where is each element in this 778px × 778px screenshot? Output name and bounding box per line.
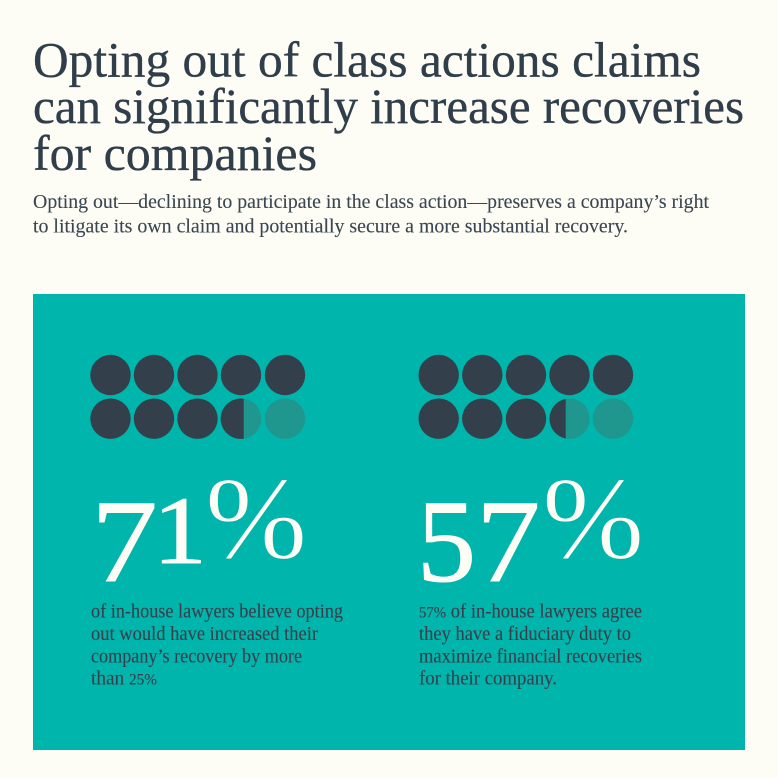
big number 71%: 1 <box>153 478 207 585</box>
panel: statistics <box>33 294 745 750</box>
intro text <box>33 191 709 238</box>
title: can significantly increase recoveries <box>33 78 744 134</box>
statistic: 71% <box>90 355 343 690</box>
intro text: to litigate its own claim and potentially secure a more substantial recovery. <box>33 216 628 238</box>
big number 57%: 7 <box>476 476 540 607</box>
title: Opting out of class actions claims <box>33 32 701 88</box>
icon: ten-dot gauge 57% <box>418 355 633 439</box>
description 71%: of in-house lawyers believe opting <box>91 602 343 622</box>
description 57%: for their company. <box>419 668 557 690</box>
description 71% <box>91 602 343 690</box>
statistic: 57% <box>417 355 644 690</box>
big number 57% <box>417 454 644 607</box>
intro text: Opting out—declining to participate in the class action—preserves a company’s right <box>33 191 709 213</box>
description 57% <box>419 602 642 690</box>
big number 57%: 5 <box>417 476 476 607</box>
description 57%: they have a fiduciary duty to <box>419 624 631 645</box>
icon: ten-dot gauge 71% <box>90 355 305 439</box>
big number 71% <box>91 454 307 607</box>
title <box>33 32 744 181</box>
description 57%: 57% of in-house lawyers agree <box>419 602 642 622</box>
description 57%: maximize financial recoveries <box>419 646 642 668</box>
description 71%: than 25% <box>91 668 157 690</box>
big number 71%: % <box>205 454 307 584</box>
description 71%: company’s recovery by more <box>91 646 302 668</box>
title: for companies <box>33 125 317 181</box>
big number 57%: % <box>542 454 644 584</box>
description 71%: out would have increased their <box>91 624 318 645</box>
big number 71%: 7 <box>91 477 158 607</box>
